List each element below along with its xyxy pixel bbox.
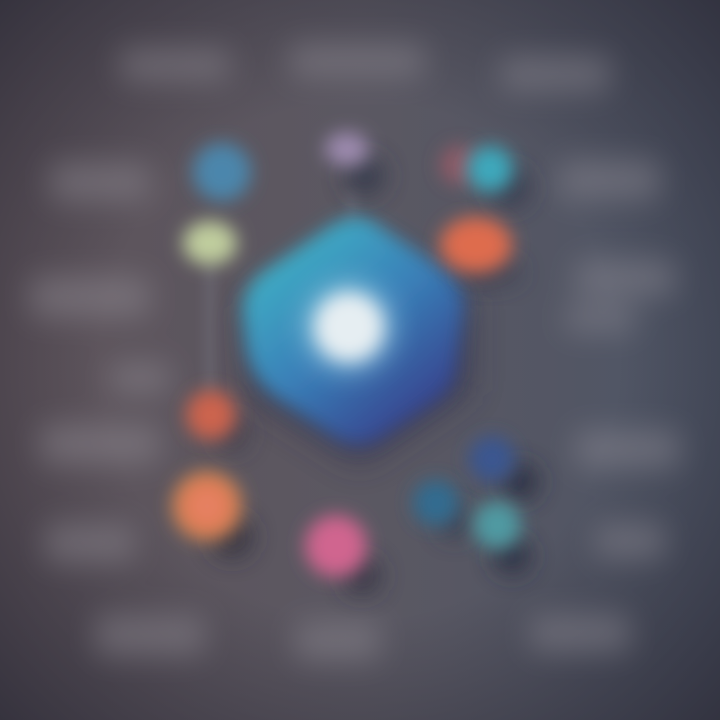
node: bottom-left orange	[172, 471, 253, 558]
central white circle	[299, 277, 399, 377]
central hexagon	[242, 217, 464, 445]
node: top-left blue	[193, 143, 251, 201]
node: bottom pink	[305, 515, 381, 595]
connector line	[210, 190, 352, 395]
blurred text labels	[30, 44, 680, 660]
node: top right cyan	[440, 145, 530, 208]
node: left yellow-green	[183, 221, 237, 265]
central hexagon shadow	[245, 235, 470, 465]
node: right orange	[440, 217, 522, 285]
node: top centre lilac	[325, 132, 385, 196]
node cluster: bottom-right blues	[413, 436, 539, 575]
node: lower-left coral	[186, 390, 249, 451]
